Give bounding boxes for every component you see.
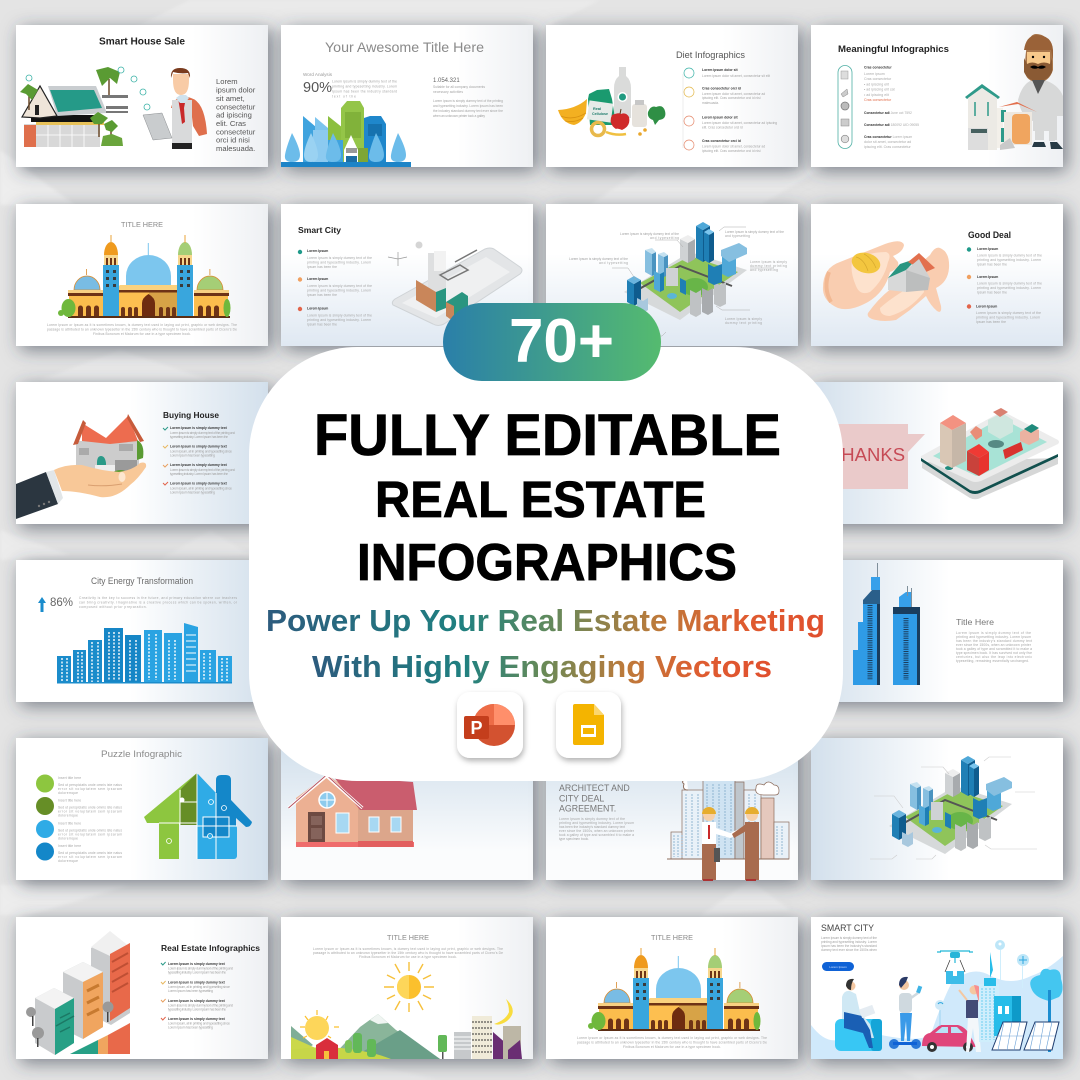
illustration: isometric bars — [26, 931, 130, 1055]
text block: printing and typesetting industry. Lorem — [821, 940, 877, 944]
illustration: isometric city on tablet — [921, 408, 1059, 499]
list: Cras consectetur orci id — [702, 86, 741, 90]
text block: took a galley of type and scrambled it to make a — [559, 833, 634, 837]
illustration: house — [288, 775, 417, 847]
text block: • ad ipiscing elit — [864, 93, 889, 97]
badge: 70+ — [443, 303, 661, 381]
stat 86%: 86% — [50, 597, 73, 609]
leader labels: Lorem Ipsum is simply dummy text of the — [620, 232, 679, 236]
illustration: house and man — [965, 34, 1063, 150]
list — [298, 249, 372, 326]
list: Lorem Ipsum is simply dummy text of the — [977, 254, 1042, 258]
text block: dolor sit amet, consectetur ad — [864, 140, 911, 144]
stat 86%: Creativity is the key to success in the future, and primary education where our teachers — [79, 596, 237, 600]
text block: Finibus Bonorum et Malorum for use in a type specimen book. — [359, 955, 457, 959]
list: Lorem ipsum dolor sit amet, consectetur ad ipiscing — [702, 121, 777, 125]
badge: 70+: 70+ — [509, 307, 614, 376]
text block: passage is attributed to an unknown typesetter in the 15th century who is thought to have scrambled parts of Cicero's De — [577, 1040, 767, 1044]
text block: Cras consectetur — [864, 77, 892, 81]
text block: printing and typesetting industry. Lorem Ipsum — [956, 635, 1031, 639]
leader labels: dummy text printing — [725, 321, 762, 325]
icon pill — [838, 66, 852, 148]
text block: ever since the 1500s, when an unknown printer — [956, 643, 1032, 647]
button — [822, 962, 854, 971]
stat 1.054.321: the industry standard dummy text ever since the — [433, 109, 503, 113]
text block: passage is attributed to an unknown typesetter in the 15th century who is thought to have scrambled parts of Cicero's De — [47, 328, 237, 332]
title: INFOGRAPHICS — [357, 533, 737, 591]
icon: Google Slides — [556, 692, 621, 758]
checklist: Lorem Ipsum has been typesetting — [168, 1026, 213, 1030]
subtitle: Power Up Your Real Estate Marketing — [266, 603, 825, 638]
list: malesuada. — [702, 101, 719, 105]
list: Ipsum has been the — [977, 290, 1007, 294]
list: printing and typesetting industry. Lorem — [307, 318, 371, 322]
card: isometric city with leaders — [546, 204, 798, 346]
leader labels: and typesetting — [650, 236, 679, 240]
leader labels: dummy text printing — [750, 264, 787, 268]
list: Ipsum has been the — [307, 322, 337, 326]
heading: Meaningful Infographics — [838, 44, 949, 55]
text block: has been the industry's standard dummy text — [956, 639, 1032, 643]
stat 90%: Ipsum has been the industry standard — [332, 90, 397, 94]
illustration: hands holding coins and house — [823, 241, 949, 321]
list: Lorem ipsum dolor sit amet, consectetur ad — [702, 92, 765, 96]
heading: TITLE HERE — [651, 933, 693, 942]
checklist: Lorem Ipsum is simply dummy text of the printing and — [168, 1004, 233, 1008]
text block: malesuada. — [216, 144, 255, 153]
list: Lorem Ipsum is simply dummy text of the — [307, 256, 372, 260]
text block: type specimen book. It has survived not only five — [956, 651, 1032, 655]
heading: AGREEMENT. — [559, 804, 616, 814]
checklist — [163, 426, 235, 494]
card: isometric city only — [811, 738, 1063, 880]
text block — [216, 77, 256, 153]
text block: Consectetur adi June oct 7592 — [864, 111, 912, 115]
card: Diet Infographics — [546, 25, 798, 167]
card: Good Deal — [811, 204, 1063, 346]
checklist: typesetting industry. Lorem Ipsum has been the — [168, 970, 226, 974]
text block: ad ipiscing — [216, 111, 252, 120]
text block: Cras consectetur Lorem ipsum — [864, 135, 912, 139]
heading: City Energy Transformation — [91, 576, 193, 586]
text block: consectetur — [216, 102, 256, 111]
text block: elit. Cras — [216, 119, 246, 128]
list: Ipsum has been the — [307, 265, 337, 269]
illustration: food: Cellulose — [592, 112, 608, 116]
leader labels: and typesetting — [750, 268, 778, 272]
text block: ipiscing elit. Cras consectetur — [864, 145, 912, 149]
list: Lorem ipsum dolor sit — [702, 116, 738, 120]
card: City Energy Transformation — [16, 560, 268, 702]
list: Sed ut perspiciatis unde omnis iste natus — [58, 851, 122, 855]
list: Insert title here — [58, 822, 81, 826]
checklist: typesetting industry. Lorem Ipsum has been the — [170, 435, 228, 439]
list: Lorem Ipsum — [307, 306, 328, 310]
list: Lorem Ipsum is simply dummy text of the — [307, 314, 372, 318]
icon: PowerPoint — [457, 692, 523, 758]
checklist: Lorem Ipsum is simply dummy text — [170, 444, 228, 448]
title: FULLY EDITABLE — [314, 403, 781, 468]
card: Smart City people — [811, 917, 1063, 1059]
illustration: mosque copy — [588, 948, 760, 1031]
list: Lorem Ipsum is simply dummy text of the — [307, 284, 372, 288]
title: REAL ESTATE — [375, 471, 706, 528]
leader labels: Lorem Ipsum is simply dummy text of the — [725, 230, 784, 234]
checklist: Lorem Ipsum is simply dummy text — [170, 463, 228, 467]
list: doloremque — [58, 791, 78, 795]
text block: Lorem Ipsum or Ipsum as it is sometimes known, is dummy text used in laying out print, graphic or web designs. The — [577, 1036, 767, 1040]
text block: type specimen book. — [559, 837, 589, 841]
stat 90%: Word Analysis — [303, 72, 333, 77]
stat 90%: printing and typesetting industry. Lorem — [332, 84, 397, 88]
card: Smart House Sale — [16, 25, 268, 167]
card: Meaningful Infographics — [811, 25, 1063, 167]
checklist: Lorem Ipsum is simply dummy text — [168, 1017, 226, 1021]
list: error sit voluptatem sem ipsaram — [58, 855, 122, 859]
text block — [559, 817, 635, 841]
text block: ever since the 1500s, when an unknown printer — [559, 829, 635, 833]
subtitle: With Highly Engaging Vectors — [312, 649, 772, 684]
list: Ipsum has been the — [976, 320, 1006, 324]
list: printing and typesetting industry. Lorem — [977, 258, 1041, 262]
list: Lorem Ipsum is simply dummy text of the — [977, 282, 1042, 286]
heading: Good Deal — [968, 230, 1011, 240]
leader labels: and typesetting — [725, 234, 750, 238]
checklist: Lorem Ipsum is simply dummy text — [170, 482, 228, 486]
leader labels: and typesetting — [599, 261, 628, 265]
list — [683, 68, 777, 153]
list: Insert title here — [58, 776, 81, 780]
list — [36, 774, 122, 863]
list: Insert title here — [58, 798, 81, 802]
card: Title Here twin towers — [811, 560, 1063, 702]
list: error sit voluptatem sem ipsaram — [58, 810, 122, 814]
list: printing and typesetting industry. Lorem — [976, 316, 1040, 320]
card: Buying House — [16, 382, 268, 524]
stat 1.054.321: and typesetting industry. Lorem Ipsum has been — [433, 104, 503, 108]
leader labels: Lorem Ipsum is simply dummy text of the — [569, 257, 628, 261]
illustration: city and handshake — [667, 779, 789, 880]
text block — [864, 66, 919, 149]
checklist: Lorem Ipsum has been typesetting — [170, 490, 215, 494]
text block: • ad ipiscing elit — [864, 82, 889, 86]
card: Brick house — [281, 738, 533, 880]
list: Lorem Ipsum — [307, 249, 328, 253]
text block: Lorem Ipsum or Ipsum as it is sometimes known, is dummy text used in laying out print, graphic or web designs. The — [313, 947, 503, 951]
list: Sed ut perspiciatis unde omnis iste natus — [58, 828, 122, 832]
text block: Finibus Bonorum et Malorum for use in a type specimen book. — [93, 332, 191, 336]
illustration: blue city — [281, 101, 411, 167]
card: Title Here landscape — [281, 917, 533, 1059]
text block: orci id nisi — [216, 136, 250, 145]
icon: house — [20, 67, 150, 147]
central panel — [249, 303, 843, 781]
heading: Buying House — [163, 411, 220, 420]
heading: Smart City — [298, 225, 341, 235]
checklist: Lorem ipsum, all in printing and typesetting since — [170, 486, 232, 490]
illustration: isometric city copy — [889, 756, 1012, 854]
illustration: food: Real — [593, 107, 601, 111]
list: Lorem ipsum dolor sit amet, consectetur sit elit — [702, 74, 770, 78]
checklist: Lorem ipsum, all in printing and typesetting since — [168, 985, 230, 989]
illustration: isometric phone — [388, 242, 522, 326]
heading: TITLE HERE — [387, 933, 429, 942]
text block: typesetting, remaining essentially unchanged. — [956, 659, 1029, 663]
list: doloremque — [58, 814, 78, 818]
list: Insert title here — [58, 844, 81, 848]
list: Lorem Ipsum — [307, 277, 328, 281]
checklist: Lorem Ipsum is simply dummy text — [168, 962, 226, 966]
list: ipiscing elit. Cras consectetur orci id nisi — [702, 96, 761, 100]
illustration: skyline — [57, 623, 232, 684]
checklist: Lorem Ipsum is simply dummy text of the printing and — [168, 966, 233, 970]
heading: CITY DEAL — [559, 794, 604, 804]
text block — [956, 618, 1032, 663]
illustration: mosque — [58, 235, 230, 318]
text block — [577, 1036, 767, 1049]
text block: Cras consectetur — [864, 98, 892, 102]
stat 90%: text of the — [332, 94, 356, 98]
illustration: puzzle house — [144, 773, 252, 859]
text block: consectetur — [216, 127, 256, 136]
text block: Lorem Ipsum is simply dummy text of the — [956, 631, 1031, 635]
list: printing and typesetting industry. Lorem — [977, 286, 1041, 290]
text block — [47, 323, 237, 336]
stat 86%: can bring creativity. Imaginative is a creative process which can be spoken, written, or — [79, 600, 238, 604]
checklist: Lorem ipsum, all in printing and typesetting since — [168, 1022, 230, 1026]
list: Lorem ipsum dolor sit amet, consectetur ad — [702, 144, 765, 148]
illustration: food — [558, 67, 665, 136]
checklist: Lorem Ipsum is simply dummy text — [170, 426, 228, 430]
card: Smart City list and phone — [281, 204, 533, 346]
leader labels: Lorem Ipsum is simply — [750, 260, 787, 264]
list: Ipsum has been the — [977, 262, 1007, 266]
text block — [313, 947, 503, 959]
card: Title Here mosque — [16, 204, 268, 346]
icon: PowerPoint: P — [470, 718, 483, 738]
illustration: hand holding house — [16, 414, 146, 519]
card: Architect and city deal agreement — [546, 738, 798, 880]
illustration: twin towers — [853, 563, 920, 685]
stat 1.054.321: Lorem ipsum is simply dummy text of the printing — [433, 99, 503, 103]
stat 1.054.321: 1.054.321 — [433, 78, 460, 84]
stat 86% — [38, 596, 238, 612]
heading: ARCHITECT AND — [559, 783, 630, 793]
heading: SMART CITY — [821, 923, 874, 933]
text block: Lorem — [216, 77, 238, 86]
title — [314, 403, 781, 591]
list: Lorem Ipsum — [977, 247, 998, 251]
text block: Cras consectetur — [864, 66, 892, 70]
checklist: Lorem ipsum, all in printing and typesetting since — [170, 450, 232, 454]
stat 90% — [303, 72, 397, 98]
text block: dummy text ever since the 1500s when — [821, 948, 877, 952]
card: Your Awesome Title Here — [281, 25, 533, 167]
leader lines — [870, 757, 1037, 859]
banner: thanks: THANKS — [830, 444, 905, 465]
list: Lorem Ipsum — [976, 304, 997, 308]
text block: Lorem Ipsum is simply dummy text of the — [559, 817, 625, 821]
text block: Finibus Bonorum et Malorum for use in a type specimen book. — [623, 1045, 721, 1049]
stat 86%: composed without prior preparation. — [79, 605, 147, 609]
banner: thanks — [820, 424, 925, 489]
text block: Ipsum has been the industry's standard — [821, 944, 877, 948]
checklist: typesetting industry. Lorem Ipsum has been the — [170, 472, 228, 476]
text block: Consectetur adi 180092 UID 09055 — [864, 123, 919, 127]
checklist: Lorem Ipsum is simply dummy text of the printing and — [170, 468, 235, 472]
text block: Lorem ipsum — [864, 72, 885, 76]
subtitle — [266, 603, 825, 684]
list: Ipsum has been the — [307, 293, 337, 297]
list: printing and typesetting industry. Lorem — [307, 260, 371, 264]
text block: printing and typesetting industry. Lorem Ipsum — [559, 821, 634, 825]
list: printing and typesetting industry. Lorem — [307, 288, 371, 292]
list: elit. Cras consectetur orci id — [702, 126, 743, 130]
checklist — [161, 962, 233, 1030]
heading — [559, 783, 630, 814]
text block: • ad ipiscing elit cat — [864, 88, 895, 92]
heading: Real Estate Infographics — [161, 943, 260, 953]
list: doloremque — [58, 836, 78, 840]
text block: took a galley of type and scrambled it to make a — [956, 647, 1032, 651]
heading: TITLE HERE — [121, 220, 163, 229]
text block: Title Here — [956, 618, 995, 627]
list — [967, 247, 1042, 324]
stat 1.054.321: when an unknown printer took a galley — [433, 114, 485, 118]
heading: Puzzle Infographic — [101, 748, 182, 759]
checklist: Lorem Ipsum has been typesetting — [170, 454, 215, 458]
heading: Diet Infographics — [676, 50, 745, 60]
card: Thanks — [811, 382, 1063, 524]
list: Sed ut perspiciatis unde omnis iste natus — [58, 806, 122, 810]
card: Puzzle Infographic — [16, 738, 268, 880]
card: hidden centre slides — [281, 382, 798, 702]
list: Lorem Ipsum is simply dummy text of the — [976, 311, 1041, 315]
text block: centuries, but also the leap into electronic — [956, 655, 1032, 659]
list: ipiscing elit. Cras consectetur orci id nisi — [702, 149, 761, 153]
leader labels — [569, 227, 787, 336]
card: Title Here mosque copy — [546, 917, 798, 1059]
list: doloremque — [58, 859, 78, 863]
list: error sit voluptatem sem ipsaram — [58, 787, 122, 791]
text block — [821, 936, 877, 952]
card: Real Estate Infographics — [16, 917, 268, 1059]
stat 1.054.321: necessary activities — [433, 90, 463, 94]
stat 1.054.321 — [433, 78, 503, 118]
heading: Smart House Sale — [99, 36, 186, 48]
heading: Your Awesome Title Here — [325, 39, 484, 55]
leader labels: Lorem Ipsum is simply — [725, 317, 762, 321]
checklist: typesetting industry. Lorem Ipsum has been the — [168, 1008, 226, 1012]
stat 1.054.321: Suitable for all company documents — [433, 85, 485, 89]
text block: has been the industry's standard dummy text — [559, 825, 625, 829]
checklist: Lorem Ipsum is simply dummy text — [168, 980, 226, 984]
text block: sit amet, — [216, 94, 245, 103]
icon: salesman with tablet — [143, 68, 207, 149]
text block: Lorem Ipsum is simply dummy text of the — [821, 936, 877, 940]
list: error sit voluptatem sem ipsaram — [58, 832, 122, 836]
list: Lorem ipsum dolor sit — [702, 68, 738, 72]
button: Lorem Ipsum — [829, 965, 847, 969]
list: Sed ut perspiciatis unde omnis iste natus — [58, 783, 122, 787]
icon: sun — [384, 962, 434, 1012]
illustration: landscape and city — [291, 999, 522, 1059]
checklist: Lorem Ipsum is simply dummy text — [168, 999, 226, 1003]
illustration: city people drone car — [811, 940, 1063, 1059]
stat 90%: 90% — [303, 80, 332, 96]
checklist: Lorem Ipsum is simply dummy text of the printing and — [170, 431, 235, 435]
list: Cras consectetur orci id — [702, 139, 741, 143]
list: Lorem Ipsum — [977, 275, 998, 279]
text block: Lorem Ipsum or Ipsum as it is sometimes known, is dummy text used in laying out print, graphic or web designs. The — [47, 323, 237, 327]
illustration: isometric city — [624, 222, 747, 320]
checklist: Lorem Ipsum has been typesetting — [168, 989, 213, 993]
text block: ipsum dolor — [216, 86, 256, 95]
text block: passage is attributed to an unknown typesetter in the 15th century who is thought to have scrambled parts of Cicero's De — [313, 951, 503, 955]
stat 90%: Lorem ipsum is simply dummy text of the — [332, 80, 397, 84]
